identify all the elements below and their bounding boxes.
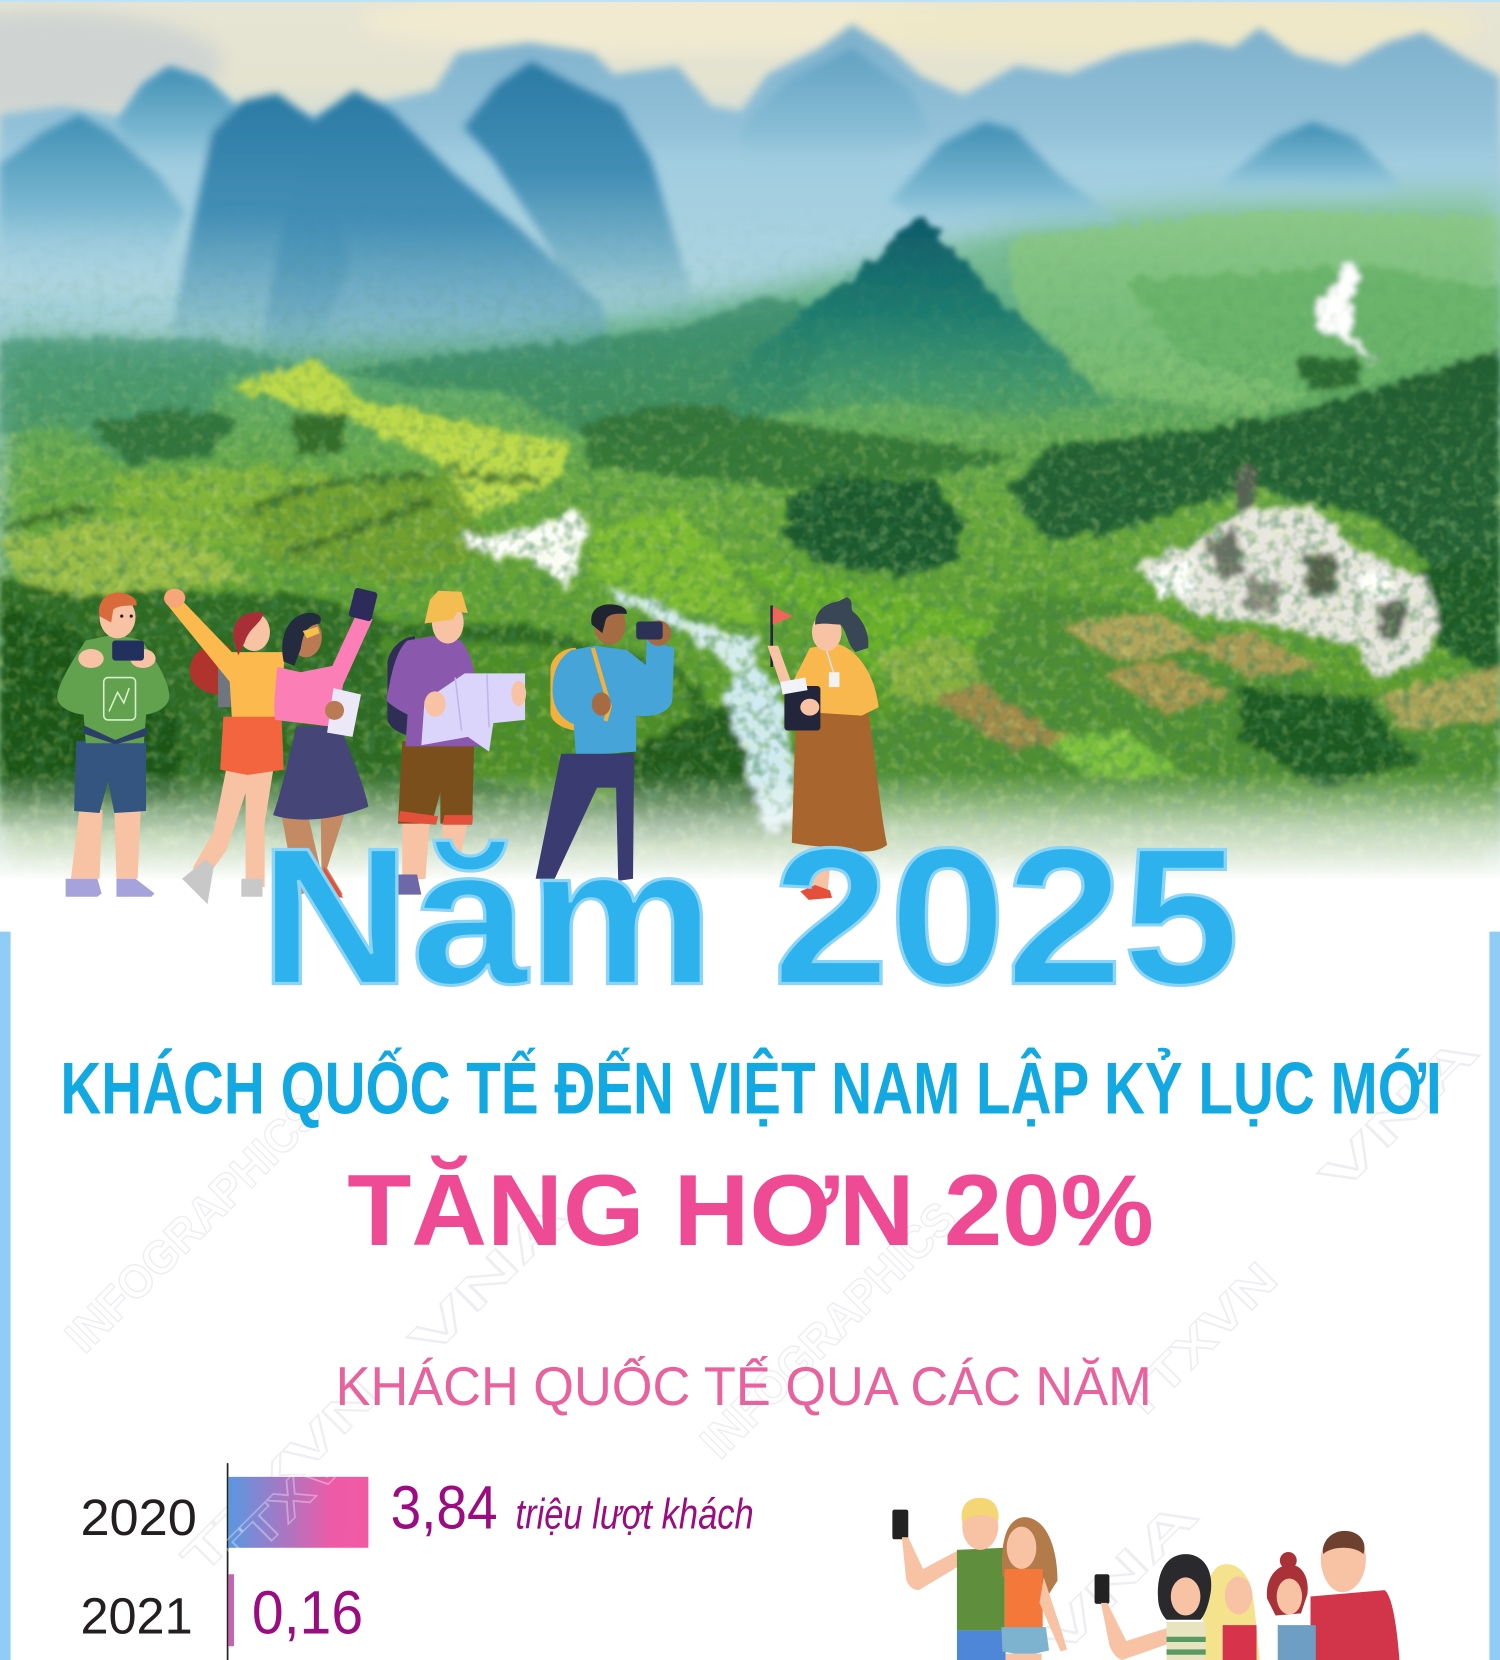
watermarks xyxy=(55,1024,1488,1660)
bar 2020: 3,84 xyxy=(391,1474,498,1543)
bar 2021: 0,16 xyxy=(252,1579,363,1648)
central terraces xyxy=(730,561,1080,730)
selfie friends illustration xyxy=(892,1498,1399,1660)
tourist 2: yellow top xyxy=(164,589,285,904)
lower left forest xyxy=(0,577,805,847)
white fade at bottom of photo xyxy=(0,771,1500,881)
tourist 4: purple sweater with map xyxy=(386,591,526,895)
selfie couple xyxy=(892,1498,1067,1660)
bar 2020 xyxy=(80,1474,754,1548)
main title: Năm 2025: Năm 2025 xyxy=(259,808,1240,1026)
terrace lines xyxy=(0,466,540,551)
watermark over bar: TTXVN xyxy=(205,1405,384,1584)
tourist 5: blue sweater with camera xyxy=(536,604,674,881)
bar 2021 xyxy=(80,1574,363,1648)
white village xyxy=(1131,466,1440,678)
bar 2020: triệu lượt khách xyxy=(516,1491,754,1538)
dark tree clusters xyxy=(783,474,963,577)
painted valley detail xyxy=(0,210,1500,847)
right valley fields xyxy=(1006,210,1500,413)
watermarks: VNA xyxy=(1309,1024,1488,1203)
mist layer xyxy=(0,148,1500,360)
selfie group of four xyxy=(1095,1531,1399,1660)
far mountain range xyxy=(0,24,1500,296)
sky xyxy=(0,0,1500,180)
right fields and patchwork xyxy=(847,593,1500,847)
left forest belt xyxy=(0,296,826,466)
watermarks: TTXVN xyxy=(1108,1252,1287,1431)
chart heading: KHÁCH QUỐC TẾ QUA CÁC NĂM xyxy=(336,1355,1152,1417)
yellow-green field xyxy=(228,360,572,519)
tourist 6: guide with flag and clipboard xyxy=(767,597,887,900)
central green peak xyxy=(730,215,1112,418)
watermarks: INFOGRAPHICS xyxy=(55,1086,331,1362)
painterly texture xyxy=(0,265,1500,851)
green valley xyxy=(0,191,1500,910)
bar 2020: 2020 xyxy=(80,1489,197,1546)
highlight: tăng hơn 20%: TĂNG HƠN 20% xyxy=(347,1153,1154,1267)
tourists illustration xyxy=(57,587,887,904)
river xyxy=(457,263,1376,836)
watermarks: INFOGRAPHICS xyxy=(690,1192,966,1468)
watermarks: VNA xyxy=(399,1188,578,1367)
tourist 3: pink top xyxy=(273,587,378,898)
background photo: karst mountains and valley xyxy=(0,0,1500,910)
tourist 1: green hoodie xyxy=(57,593,169,897)
watermarks: TTXVN xyxy=(171,1368,388,1584)
bar chart: international visitors by year xyxy=(80,1463,754,1660)
bar 2021: 2021 xyxy=(80,1588,193,1645)
blue mountains xyxy=(0,48,1403,381)
